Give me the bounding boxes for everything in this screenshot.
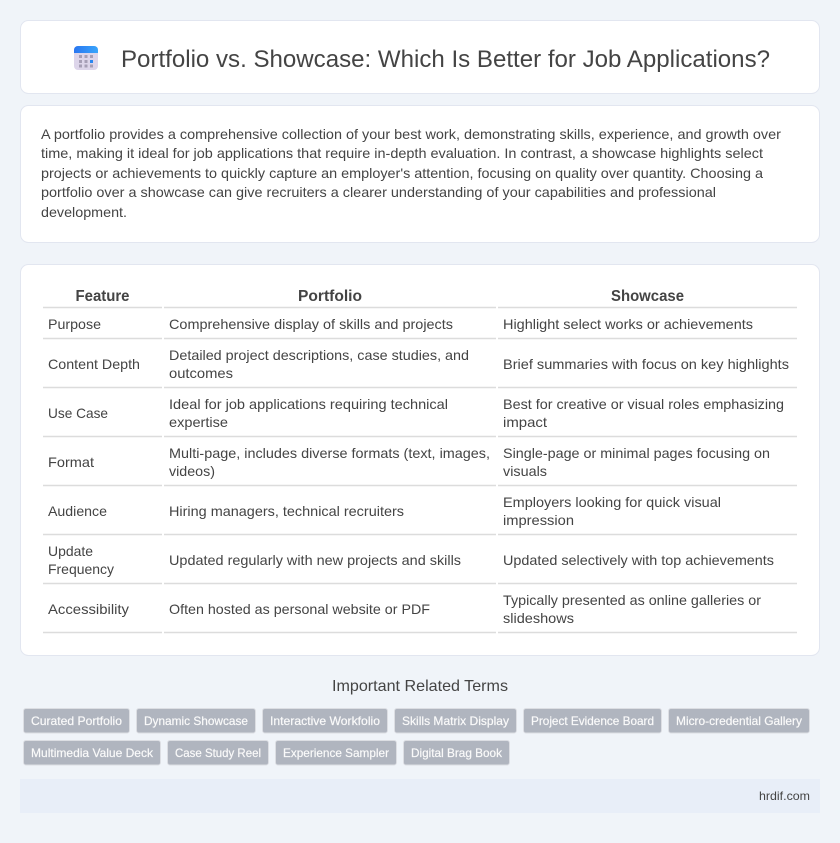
intro paragraph: time, making it ideal for job applications that require in-depth evaluation. In contrast, a showcase highlights select	[41, 145, 763, 161]
footer source: hrdif.com	[759, 789, 810, 803]
row: format: Single-page or minimal pages focusing on	[503, 445, 770, 461]
tag list: related terms: Digital Brag Book	[411, 746, 503, 760]
panel: comparison table	[20, 264, 820, 656]
row: use case: Use Case	[48, 405, 108, 421]
row: audience: Employers looking for quick visual	[503, 494, 721, 510]
row: accessibility: Often hosted as personal website or PDF	[169, 601, 430, 617]
row: purpose	[48, 316, 753, 332]
row: content depth: Brief summaries with focus on key highlights	[503, 356, 789, 372]
intro paragraph	[41, 126, 781, 220]
title: Portfolio vs. Showcase: Which Is Better for Job Applications?	[121, 46, 770, 73]
heading: important related terms: Important Related Terms	[332, 678, 508, 695]
intro paragraph: portfolio over a showcase can give recruiters a clearer understanding of your capabilities and professional	[41, 184, 716, 200]
row: content depth: outcomes	[169, 365, 233, 381]
table header: Showcase	[611, 288, 684, 305]
row: update frequency: Updated selectively with top achievements	[503, 552, 774, 568]
table header	[76, 288, 684, 305]
footer bar	[20, 779, 820, 813]
panel: intro text card	[20, 106, 820, 242]
row: use case	[48, 396, 784, 430]
tag list: related terms	[24, 708, 810, 765]
row: accessibility: slideshows	[503, 610, 574, 626]
panel: title card	[20, 20, 820, 94]
intro paragraph: development.	[41, 204, 127, 220]
row: use case: Ideal for job applications requiring technical	[169, 396, 448, 412]
tag list: related terms: Curated Portfolio	[31, 714, 122, 728]
row: format: videos)	[169, 463, 215, 479]
row: content depth: Content Depth	[48, 356, 140, 372]
row: purpose: Purpose	[48, 316, 101, 332]
row: format: visuals	[503, 463, 547, 479]
row: update frequency: Updated regularly with new projects and skills	[169, 552, 461, 568]
row: audience: Audience	[48, 503, 107, 519]
row: content depth: Detailed project descriptions, case studies, and	[169, 347, 469, 363]
row: audience	[48, 494, 721, 528]
tag list: related terms: Experience Sampler	[283, 746, 389, 760]
row: accessibility: Typically presented as online galleries or	[503, 592, 761, 608]
row: use case: expertise	[169, 414, 228, 430]
icon: calendar	[74, 46, 98, 70]
row: audience: Hiring managers, technical recruiters	[169, 503, 404, 519]
tag list: related terms: Multimedia Value Deck	[31, 746, 154, 760]
row: content depth	[48, 347, 789, 381]
row: accessibility	[48, 592, 761, 626]
table header: Portfolio	[298, 288, 362, 305]
row: use case: impact	[503, 414, 547, 430]
row: purpose: Highlight select works or achievements	[503, 316, 753, 332]
tag list: related terms: Interactive Workfolio	[270, 714, 380, 728]
intro paragraph: projects or achievements to quickly capture an employer's attention, focusing on quality over quantity. Choosing a	[41, 165, 763, 181]
row: format: Format	[48, 454, 94, 470]
table header: Feature	[76, 288, 130, 305]
row: update frequency	[48, 543, 774, 577]
tag list: related terms: Case Study Reel	[175, 746, 261, 760]
row: update frequency: Update	[48, 543, 93, 559]
row: format: Multi-page, includes diverse formats (text, images,	[169, 445, 490, 461]
tag list: related terms: Skills Matrix Display	[402, 714, 509, 728]
row: purpose: Comprehensive display of skills and projects	[169, 316, 453, 332]
tag list: related terms: Project Evidence Board	[531, 714, 654, 728]
tag list: related terms: Dynamic Showcase	[144, 714, 248, 728]
row: accessibility: Accessibility	[48, 601, 129, 617]
row: audience: impression	[503, 512, 574, 528]
row: use case: Best for creative or visual roles emphasizing	[503, 396, 784, 412]
row: format	[48, 445, 770, 479]
row: update frequency: Frequency	[48, 561, 114, 577]
tag list: related terms: Micro-credential Gallery	[676, 714, 802, 728]
intro paragraph: A portfolio provides a comprehensive collection of your best work, demonstrating skills, experience, and growth over	[41, 126, 781, 142]
